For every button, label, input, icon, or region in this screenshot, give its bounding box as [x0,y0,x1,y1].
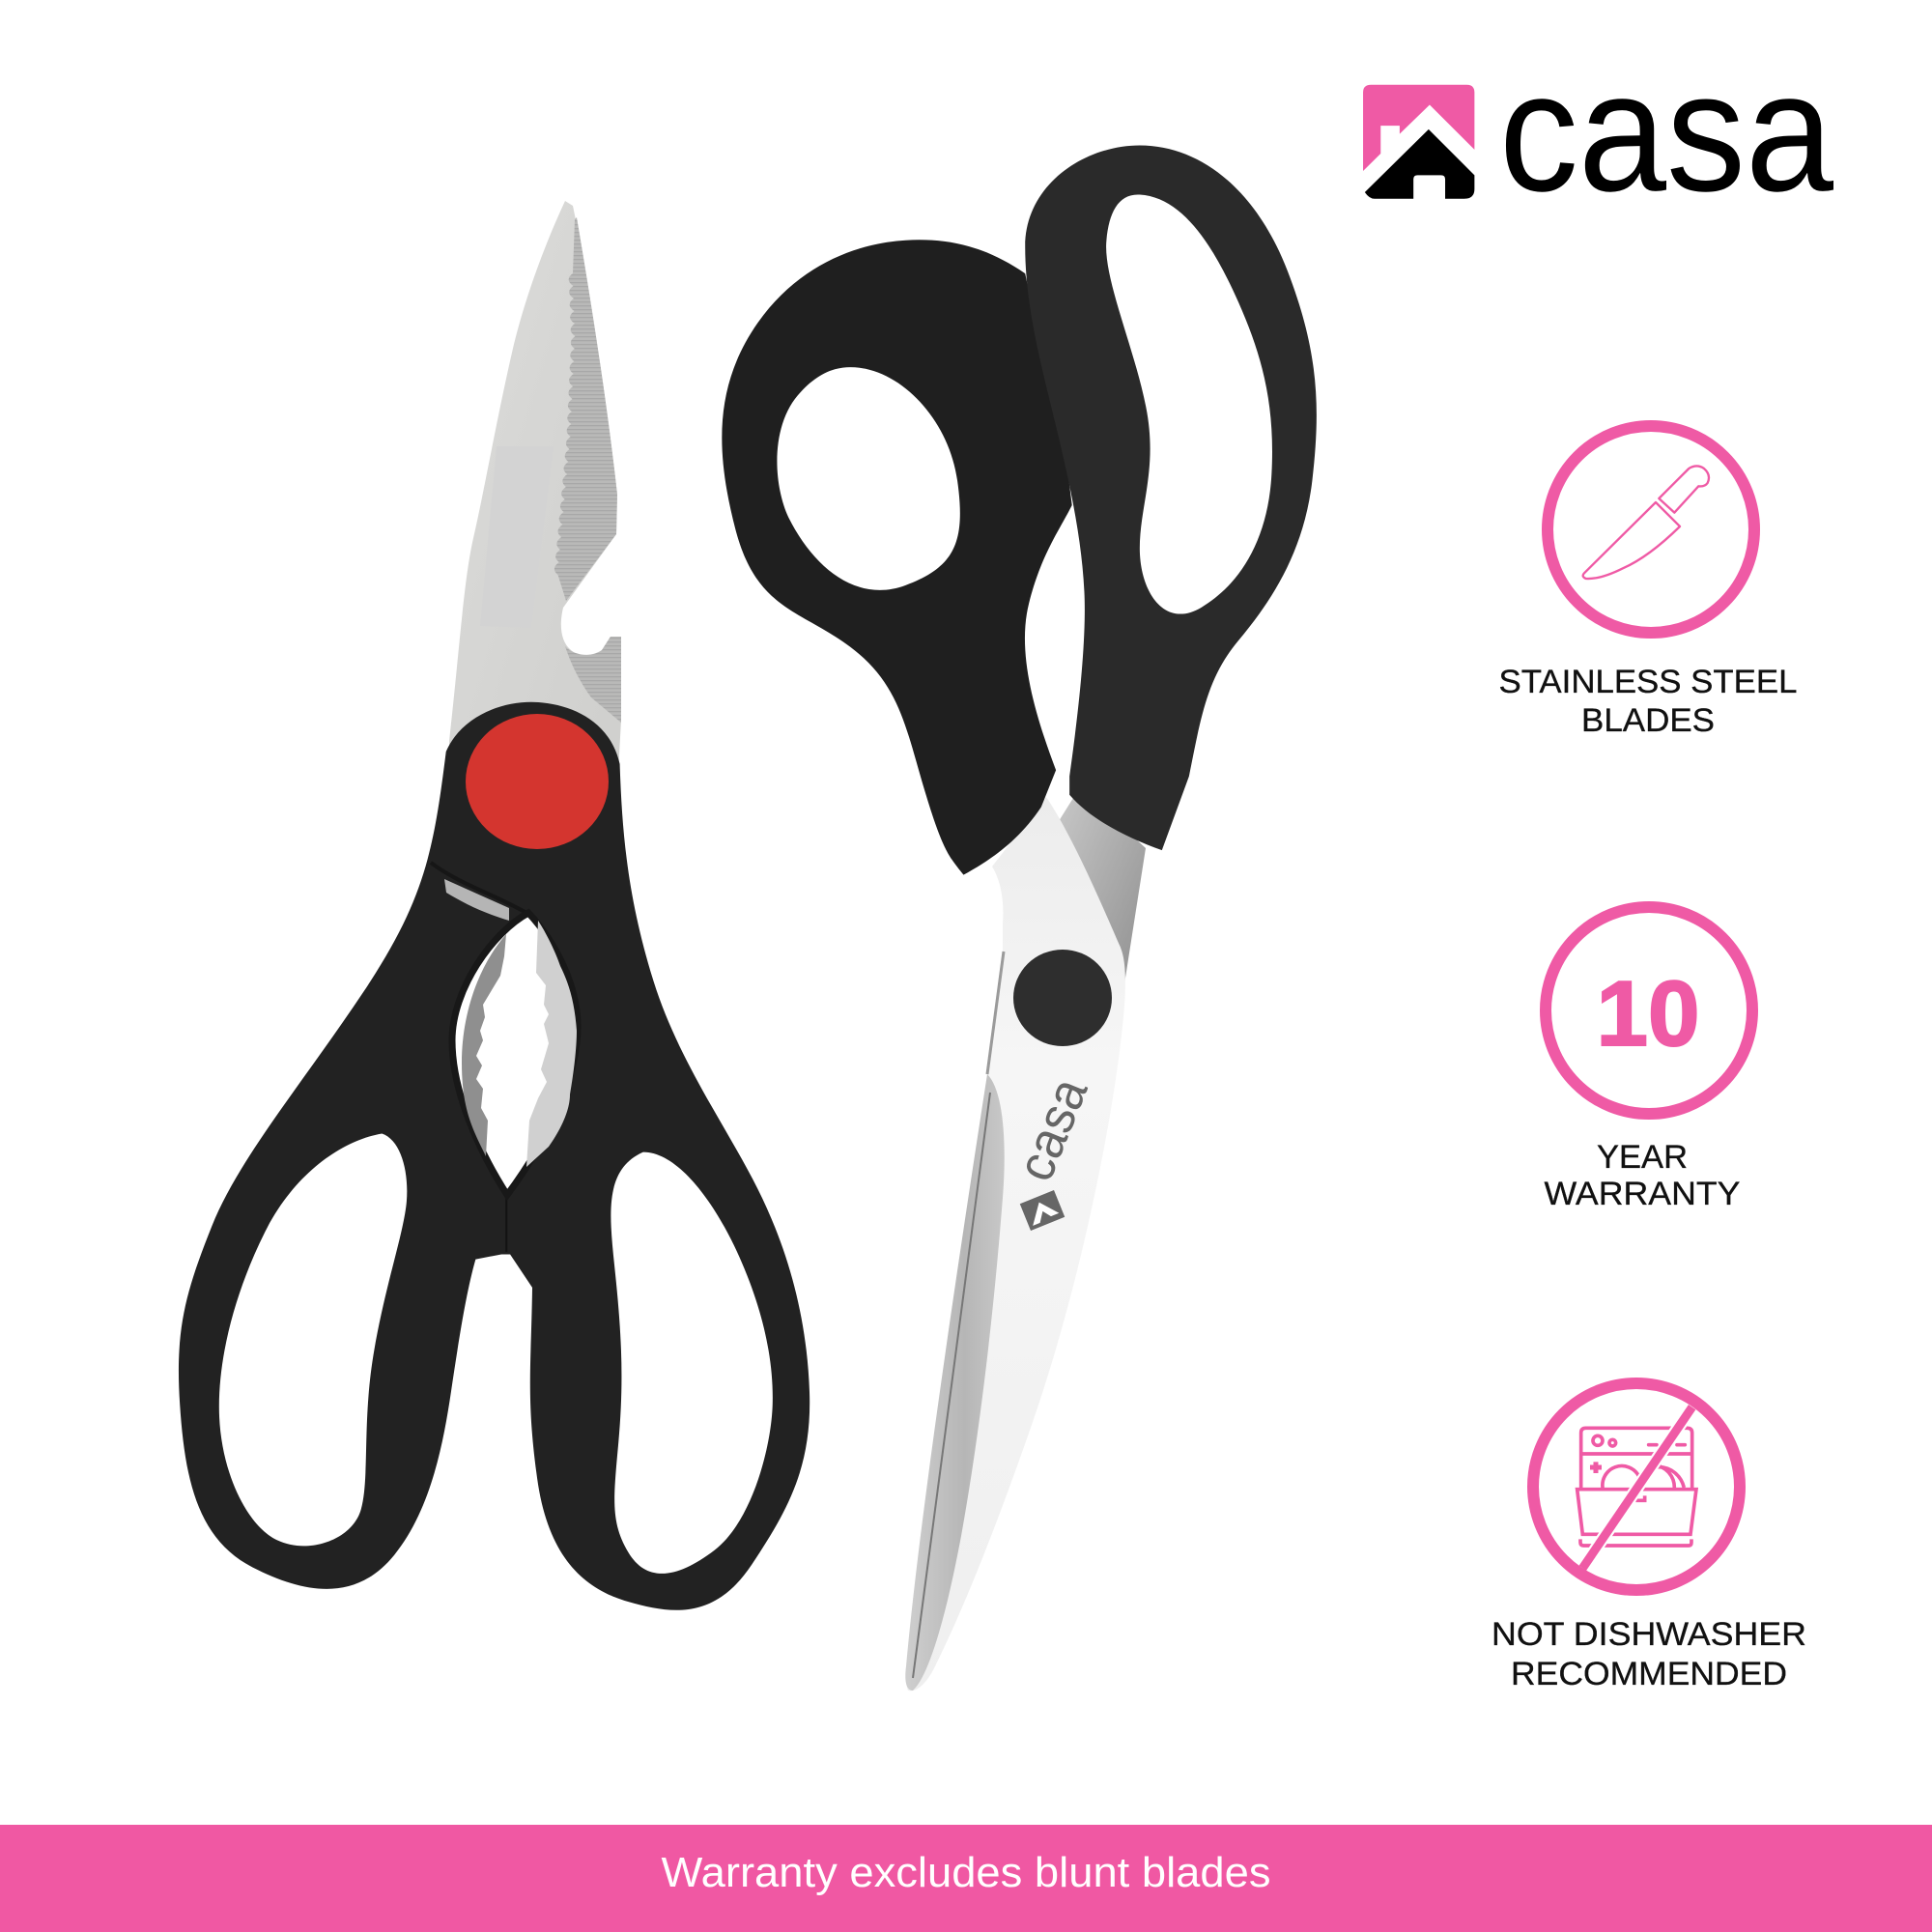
logo wordmark: casa [1499,38,1833,227]
handle seam [431,863,526,913]
logo icon: pink roof and black house [1363,85,1474,199]
blade logo mark [1020,1190,1065,1231]
front handle hole [1106,194,1272,614]
banner text: Warranty excludes blunt blades [661,1849,1271,1896]
feature: 10 year warranty [1544,907,1752,1212]
jaw opening with serrated teeth [452,913,578,1195]
label: STAINLESS STEEL [1499,664,1797,700]
label [1499,664,1797,739]
front handle [1025,146,1317,850]
black rivet [1013,950,1112,1046]
blade logo text: casa [1006,1069,1099,1189]
label: NOT DISHWASHER [1492,1616,1806,1653]
feature: not dishwasher recommended [1492,1383,1806,1692]
casa logo [1363,38,1833,227]
label: WARRANTY [1544,1176,1741,1212]
stainless steel blade [905,797,1125,1690]
label [1544,1139,1741,1212]
label: BLADES [1581,702,1715,739]
kitchen shears (left scissors) [179,201,810,1610]
back handle [722,240,1072,875]
upper gray blade [1059,787,1146,990]
label: RECOMMENDED [1511,1656,1787,1692]
feature: stainless steel blades [1499,426,1797,739]
household scissors (right scissors) [722,146,1317,1690]
small blade shard under seam [444,879,509,921]
bottom banner [0,1825,1932,1932]
serrated blade [449,201,621,773]
left finger hole [219,1133,407,1546]
icon: 10 in circle: 10 [1596,962,1700,1065]
back handle hole [777,367,960,590]
label: YEAR [1597,1139,1688,1176]
black handles [722,146,1317,875]
icon: crossed-out dishwasher [1533,1383,1740,1590]
centre slit between handles [505,1195,507,1252]
label [1492,1616,1806,1692]
icon: knife in circle [1548,426,1754,633]
red pivot button [466,714,609,849]
right finger hole [611,1152,773,1574]
black handles [179,702,810,1610]
icon: 10 in circle [1546,907,1752,1114]
